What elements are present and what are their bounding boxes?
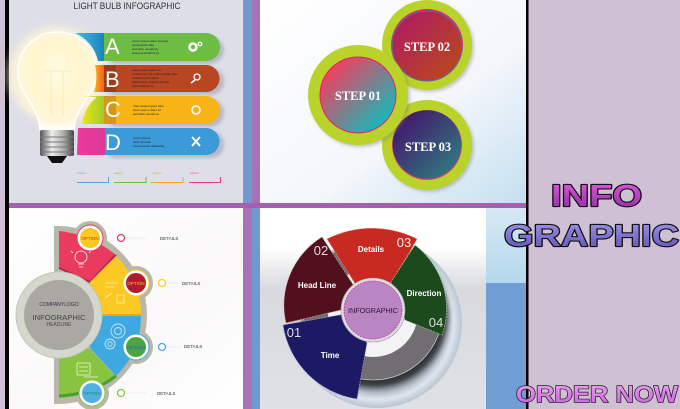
step 03: STEP 03 — [405, 140, 451, 154]
center circle: INFOGRAPHIC — [348, 306, 399, 315]
bar A — [75, 33, 220, 61]
badge: green segment — [79, 380, 105, 406]
panel: half-circle infographic — [9, 208, 243, 409]
center circle — [16, 272, 102, 358]
bar A: euismod tincidunt ut — [132, 51, 159, 55]
bar B: ullamcorper suscipit lobortis — [132, 80, 170, 84]
badge: green segment: OPTION — [83, 391, 101, 396]
bar shadows — [104, 36, 224, 158]
sector: details — [327, 228, 417, 285]
gray ring — [303, 240, 443, 380]
labels: Head Line — [298, 281, 337, 290]
bar C: C — [105, 97, 121, 122]
labels: 03 — [397, 235, 411, 250]
bar D: Lorem ipsum — [133, 136, 151, 140]
title: info graphic: INFO — [551, 178, 642, 213]
bar D: D — [105, 130, 121, 155]
badge: blue segment — [123, 334, 149, 360]
labels: Time — [321, 351, 340, 360]
badge: red segment: OPTION — [81, 236, 99, 241]
legend labels: Lorem — [190, 171, 199, 175]
bar B: Lorem ipsum dolor sit — [132, 68, 161, 72]
segment: green — [59, 345, 116, 398]
bar C — [82, 96, 220, 124]
legend labels: Lorem — [114, 171, 123, 175]
center circle: INFOGRAPHIC — [32, 313, 86, 322]
center circle: HEADLINE — [46, 322, 72, 328]
bar B: B — [105, 67, 120, 92]
labels: 04 — [429, 315, 443, 330]
outer disc — [292, 238, 462, 408]
button text: order now: ORDER NOW — [516, 381, 678, 407]
bar B: ut wisi enim ad minim veniam quis — [132, 72, 178, 76]
icon: form — [77, 363, 98, 377]
segment: yellow — [90, 256, 141, 315]
icon: gears — [105, 324, 125, 349]
bar A: A — [105, 34, 120, 59]
segment: red — [59, 231, 116, 282]
bar C: lorem ipsum dolor sit — [133, 108, 161, 112]
labels: 01 — [287, 325, 301, 340]
detail items: DETAILS — [157, 391, 175, 396]
title: info graphic — [504, 178, 679, 253]
bar A: sed diam nonummy — [132, 47, 159, 51]
icon: chart lines — [105, 283, 124, 303]
step 01: STEP 01 — [335, 89, 381, 103]
bar B: nisl ut aliquip ex — [132, 84, 154, 88]
bar A: Lorem ipsum dolor sit amet — [132, 39, 168, 43]
badge: red segment — [77, 225, 103, 251]
legend labels: Lorem — [153, 171, 162, 175]
panel: light bulb infographic — [9, 0, 243, 203]
detail items: DETAILS — [182, 281, 200, 286]
heading: LIGHT BULB INFOGRAPHIC — [74, 1, 181, 12]
icon: idea bulb — [71, 251, 91, 267]
shadow — [302, 242, 448, 388]
bar A: consectetur adip — [132, 43, 154, 47]
center circle: COMPANYLOGO — [39, 302, 79, 308]
title: info graphic: GRAPHIC — [504, 218, 679, 253]
icon: light bulb — [9, 27, 105, 163]
bar D: dolor sit amet — [133, 140, 151, 144]
sector: time — [283, 314, 367, 399]
labels: 02 — [314, 243, 328, 258]
bar C: sed diam nonummy — [133, 112, 160, 116]
labels — [287, 235, 443, 360]
black frame lines — [5, 0, 528, 409]
backing shape — [54, 221, 153, 409]
detail items — [118, 234, 202, 396]
badge: yellow segment — [123, 270, 149, 296]
sector: head line — [284, 237, 354, 323]
sector: direction — [391, 245, 446, 335]
divider bands — [9, 0, 526, 409]
detail items: DETAILS — [184, 344, 202, 349]
center circle — [341, 278, 405, 342]
bar D: consectetuer adipiscing — [133, 144, 165, 148]
bar B: nostrud exerci tation — [132, 76, 159, 80]
segment: blue — [90, 316, 141, 376]
step 03 — [382, 100, 474, 192]
detail items: DETAILS — [160, 236, 178, 241]
bar C: Your content goes here — [133, 104, 164, 108]
step 02 — [382, 0, 474, 92]
badge: yellow segment: OPTION — [127, 281, 145, 286]
badge: blue segment: OPTION — [127, 345, 145, 350]
legend labels — [77, 171, 220, 182]
bar B — [94, 65, 219, 92]
step 02: STEP 02 — [404, 40, 450, 54]
bar D — [77, 128, 219, 155]
panel: three steps — [260, 0, 526, 203]
side strip — [486, 208, 526, 409]
labels: Details — [358, 245, 385, 254]
step 01 — [308, 45, 410, 147]
panel: pie infographic — [260, 208, 526, 409]
labels: Direction — [407, 289, 441, 298]
legend labels: Lorem — [77, 171, 86, 175]
